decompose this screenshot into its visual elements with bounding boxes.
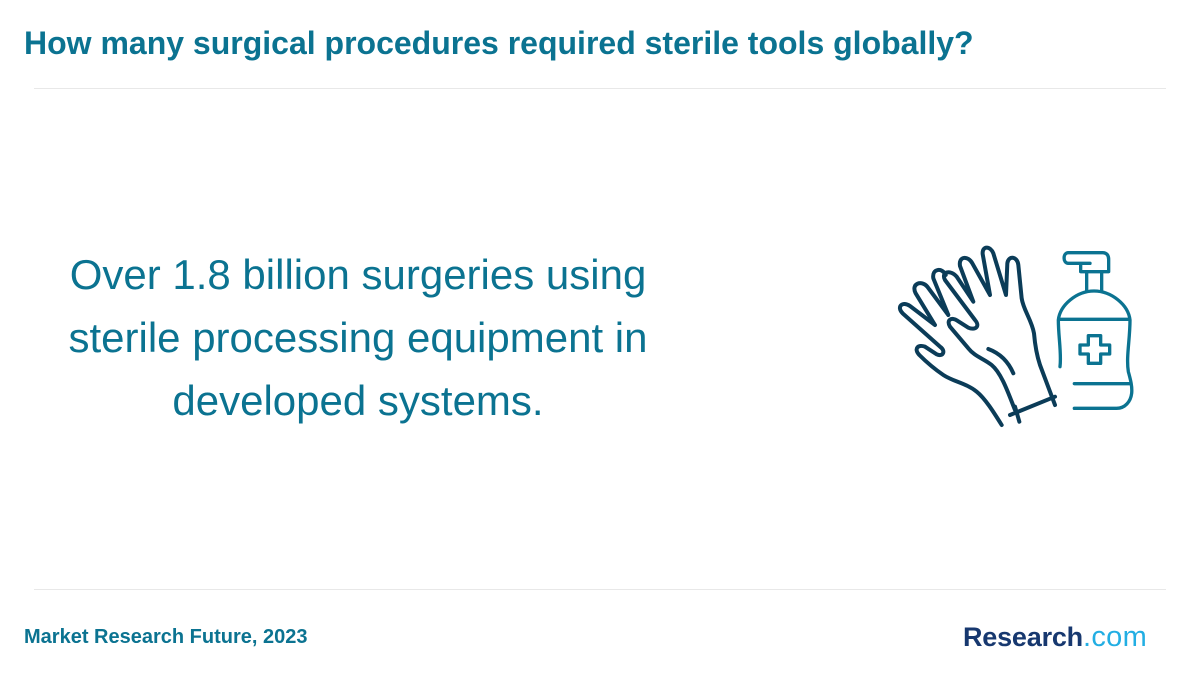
icon: sanitizer bottle	[1058, 253, 1132, 408]
bottom divider	[34, 589, 1166, 590]
top divider	[34, 88, 1166, 89]
icon: gloves and sanitizer	[898, 246, 1134, 428]
main statement: Over 1.8 billion surgeries using	[70, 251, 646, 298]
main statement: sterile processing equipment in	[68, 314, 647, 361]
title: How many surgical procedures required sterile tools globally?	[24, 25, 974, 61]
main statement	[68, 251, 647, 424]
logo: Research.com	[963, 621, 1147, 653]
source: Market Research Future, 2023	[24, 626, 307, 648]
main statement: developed systems.	[172, 377, 544, 424]
icon: gloves	[900, 248, 1055, 425]
